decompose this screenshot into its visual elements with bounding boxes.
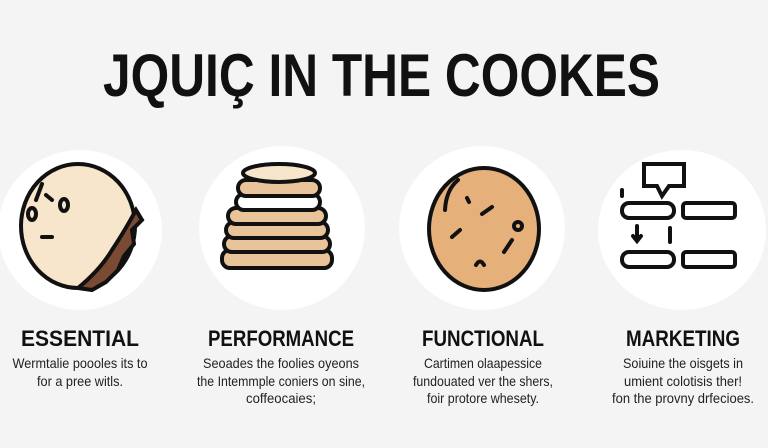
panel: marketing [598, 150, 766, 406]
panel: performance [197, 146, 365, 406]
text: functional: Cartimen olaapessice [424, 355, 542, 371]
text: essential [12, 355, 148, 389]
text: marketing: Soiuine the oisgets in [623, 355, 743, 371]
title: JQUIÇ IN THE COOKES [103, 42, 660, 109]
text: functional [413, 355, 553, 406]
heading: essential: ESSENTIAL [21, 326, 139, 351]
text: performance [197, 355, 365, 406]
heading: functional: FUNCTIONAL [422, 326, 544, 351]
heading: marketing: MARKETING [626, 326, 740, 351]
text: essential: for a pree witls. [37, 373, 123, 389]
text: performance: coffeocaies; [246, 390, 316, 406]
icon: bitten cookie [21, 164, 142, 290]
text: essential: Wermtalie poooles its to [12, 355, 148, 371]
text: marketing: umient colotisis ther! [624, 373, 742, 389]
panel: functional [399, 146, 565, 406]
icon: cookie stack [222, 164, 332, 268]
text: marketing: fon the provny drfecioes. [612, 390, 754, 406]
icon: round cookie [429, 168, 539, 290]
text: performance: the Intemmple coniers on sine, [197, 373, 365, 389]
icon: flowchart [622, 164, 735, 267]
text: functional: foir protore whesety. [427, 390, 539, 406]
text: marketing [612, 355, 754, 406]
panel: essential [0, 150, 162, 389]
text: functional: fundouated ver the shers, [413, 373, 553, 389]
text: performance: Seoades the foolies oyeons [203, 355, 359, 371]
heading: performance: PERFORMANCE [208, 326, 354, 351]
